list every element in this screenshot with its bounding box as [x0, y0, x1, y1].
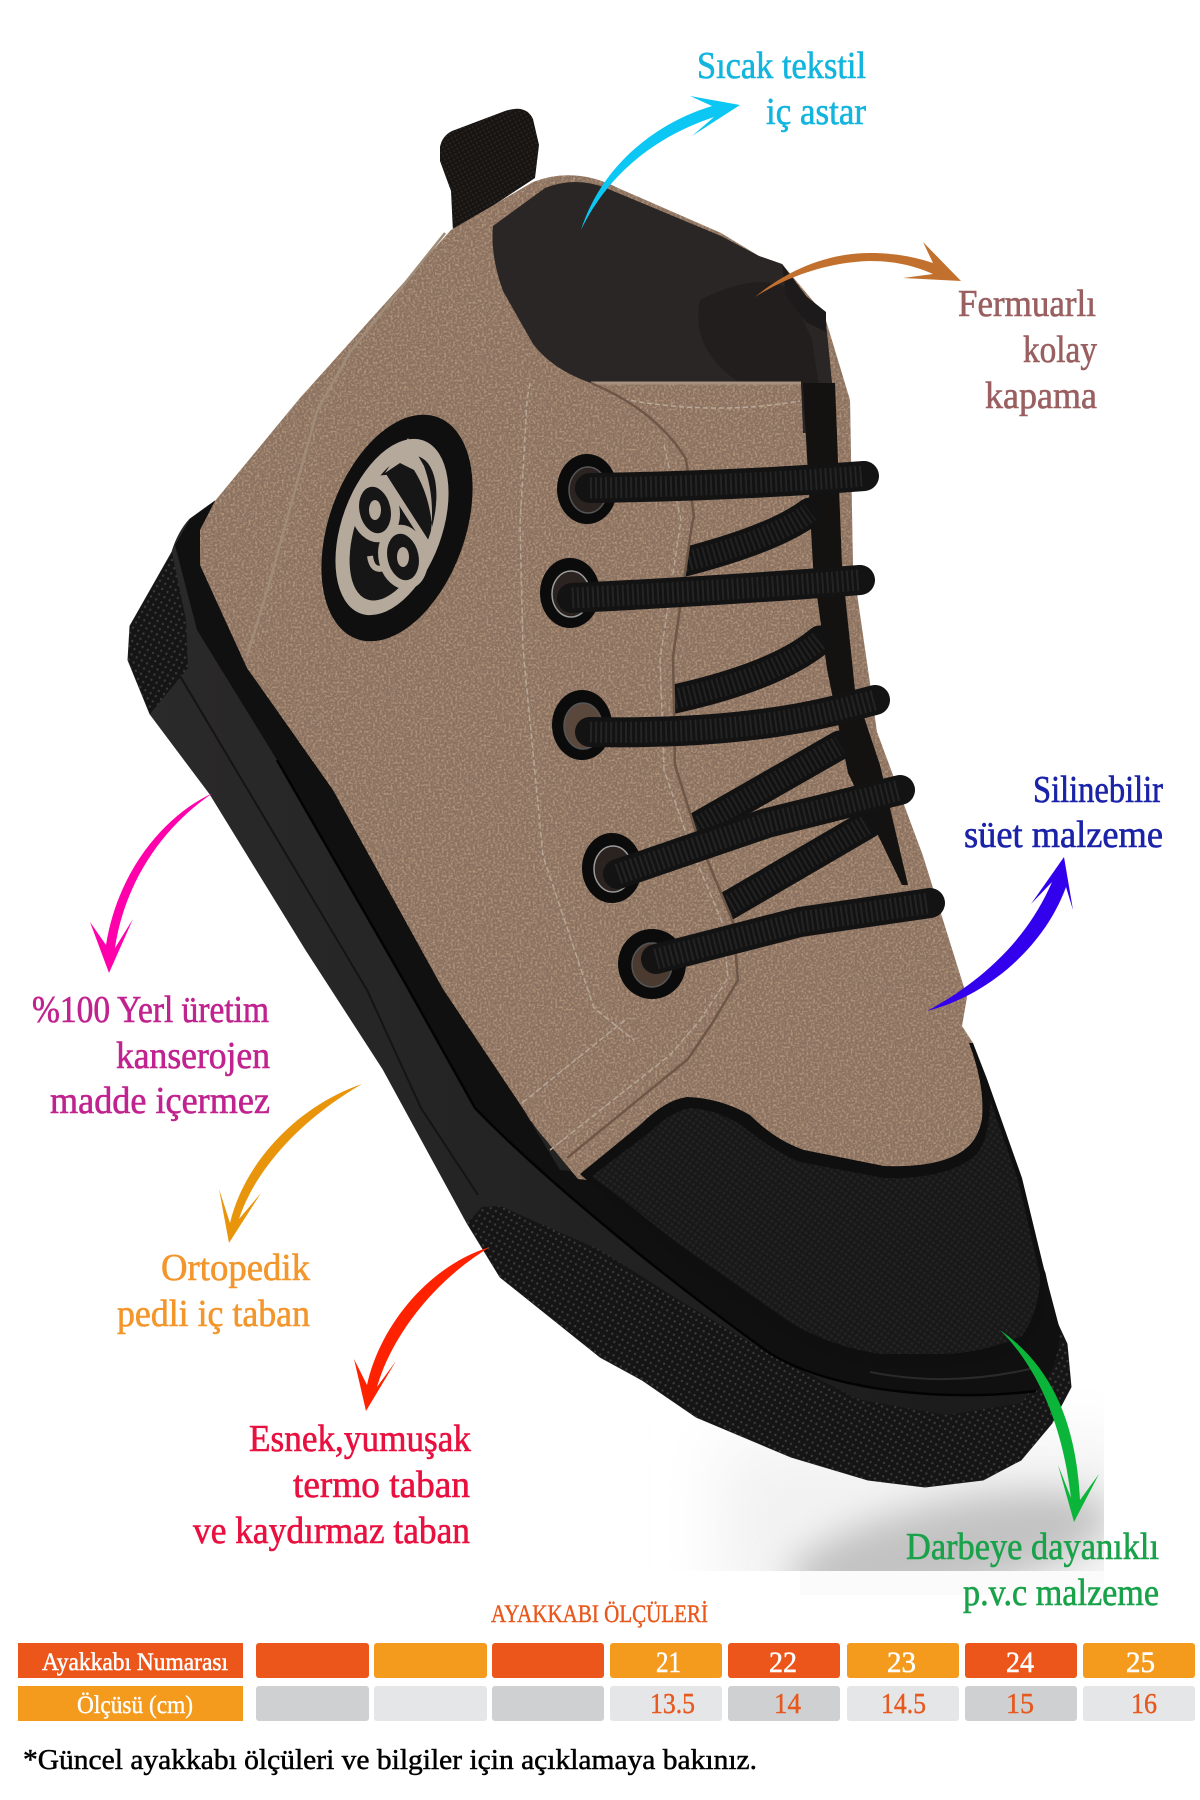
callout: zipper: [755, 242, 1097, 417]
top laces: [572, 476, 930, 959]
label: zipper: Fermuarlı: [958, 283, 1096, 325]
label: sole: [193, 1418, 471, 1552]
row: shoe number: Ayakkabı Numarası: [42, 1649, 228, 1676]
label: zipper: kolay: [1023, 329, 1097, 371]
eyelets: [540, 454, 686, 999]
label: warm lining: iç astar: [766, 91, 866, 133]
label: pvc: p.v.c malzeme: [963, 1572, 1159, 1614]
callout: sole: [193, 1247, 490, 1552]
row: shoe number: 25: [1126, 1646, 1155, 1679]
arrow: red: [354, 1247, 490, 1411]
arrow: orange: [219, 1084, 362, 1243]
label: zipper: [958, 283, 1097, 417]
eyelet panel edge: [567, 383, 738, 1158]
tongue top edge: [591, 382, 801, 384]
label: sole: termo taban: [293, 1464, 470, 1506]
row: measurement: 13.5: [650, 1688, 695, 1720]
label: sole: ve kaydırmaz taban: [193, 1510, 470, 1552]
toe cap: [580, 1043, 1045, 1368]
row: measurement: 16: [1131, 1688, 1157, 1720]
label: local production: %100 Yerl üretim: [32, 989, 269, 1031]
faint haze below shadow: [800, 1571, 1104, 1595]
label: insole: Ortopedik: [161, 1247, 310, 1289]
label: insole: pedli iç taban: [117, 1293, 310, 1335]
under laces: [640, 512, 868, 922]
row: shoe number: 22: [769, 1646, 797, 1679]
label: pvc: Darbeye dayanıklı: [906, 1526, 1159, 1568]
fleece fold: [698, 282, 825, 425]
tongue stitching: [600, 394, 800, 408]
row: measurement: [18, 1686, 1195, 1721]
label: sole: Esnek,yumuşak: [249, 1418, 471, 1460]
lace weave: [572, 476, 930, 959]
label: pvc: [906, 1526, 1159, 1614]
row: shoe number: [18, 1643, 1195, 1679]
arrow: pink: [90, 793, 213, 973]
arrow: blue: [927, 857, 1073, 1011]
forefoot tread texture: [467, 1206, 1071, 1487]
arrow: cyan: [581, 96, 740, 230]
logo badge: [293, 394, 501, 662]
callout: local production: [32, 793, 270, 1122]
row: shoe number: 23: [887, 1646, 916, 1679]
panel stitching: [520, 383, 728, 1150]
rim highlight: [870, 1368, 1034, 1379]
floor shadow: [731, 1448, 1104, 1571]
suede upper: [200, 175, 990, 1185]
pull tab: [440, 109, 539, 232]
label: warm lining: Sıcak tekstil: [697, 45, 866, 87]
label: zipper: kapama: [985, 375, 1097, 417]
inner dark gap strip: [803, 383, 908, 885]
arrow: brown: [755, 242, 961, 297]
label: suede: [964, 769, 1163, 856]
row: shoe number: 24: [1006, 1646, 1034, 1679]
callout: insole: [117, 1084, 362, 1335]
table heading: AYAKKABI ÖLÇÜLERİ: [491, 1601, 708, 1628]
label: local production: kanserojen: [116, 1035, 270, 1077]
fleece lining: [492, 182, 837, 433]
heel tread texture: [128, 552, 188, 714]
callout: pvc: [906, 1330, 1159, 1614]
arrow: green: [1000, 1330, 1099, 1522]
label: warm lining: [697, 45, 866, 133]
label: insole: [117, 1247, 310, 1335]
row: measurement: 14: [774, 1688, 801, 1720]
label: local production: [32, 989, 270, 1122]
shoe illustration: [128, 109, 1071, 1487]
label: suede: süet malzeme: [964, 814, 1163, 856]
wall crease: [180, 676, 478, 1195]
footnote: *Güncel ayakkabı ölçüleri ve bilgiler için açıklamaya bakınız.: [23, 1744, 757, 1776]
row: measurement: Ölçüsü (cm): [77, 1692, 193, 1719]
zipper: [782, 264, 826, 332]
callout: suede: [927, 769, 1163, 1011]
eyelet panel: [420, 383, 738, 1158]
rim band: [175, 501, 1060, 1395]
size table: [18, 1643, 1195, 1721]
back seam: [247, 233, 445, 656]
row: shoe number: 21: [656, 1646, 681, 1679]
toe cap grain: [592, 1100, 1040, 1354]
sole outer wall: [128, 501, 1071, 1487]
row: measurement: 15: [1006, 1688, 1034, 1720]
label: local production: madde içermez: [50, 1080, 270, 1122]
rim groove: [277, 760, 1036, 1395]
under lace weave: [640, 512, 868, 922]
row: measurement: 14.5: [881, 1688, 926, 1720]
label: suede: Silinebilir: [1033, 769, 1163, 811]
callout: warm lining: [581, 45, 866, 230]
